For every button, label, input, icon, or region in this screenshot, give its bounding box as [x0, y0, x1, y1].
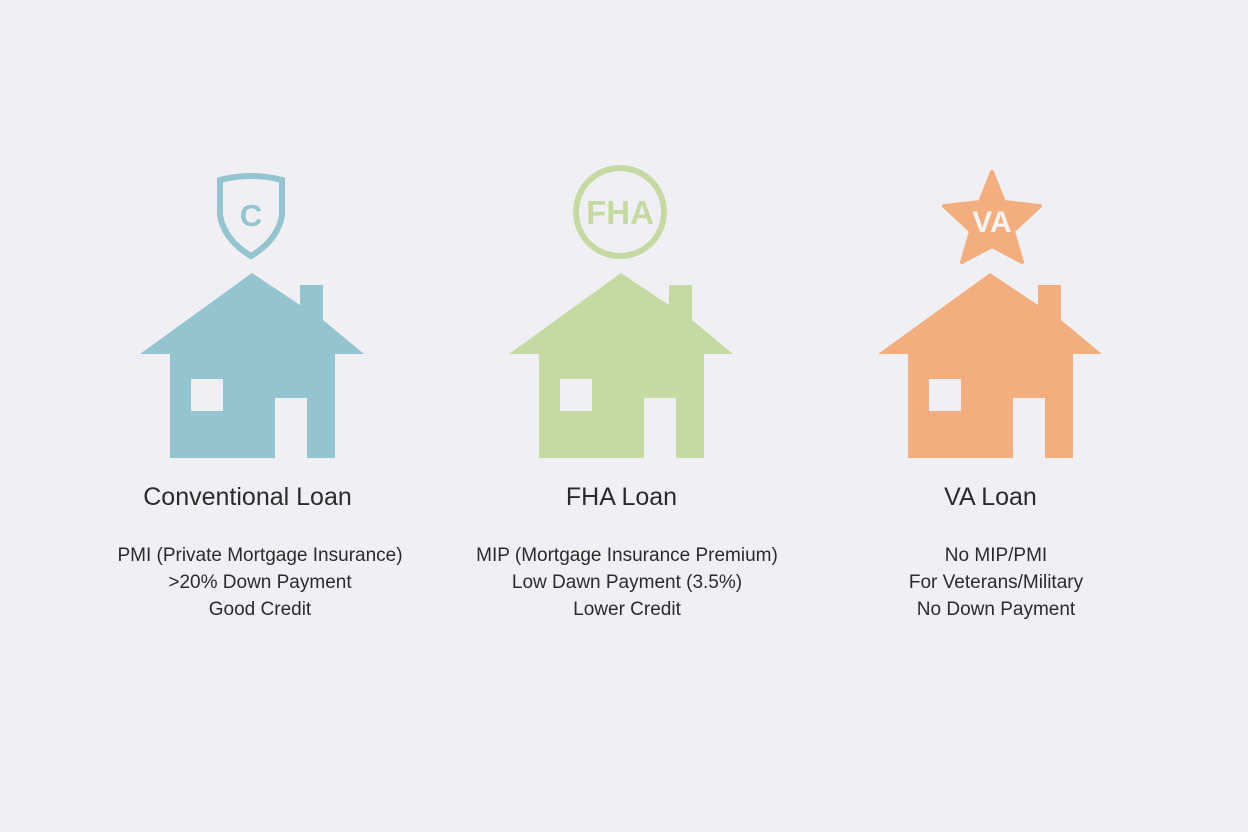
icon: shield house: C [240, 198, 262, 233]
text block [117, 545, 403, 620]
panel: conventional [117, 165, 1028, 620]
text block: Low Dawn Payment (3.5%) [512, 572, 742, 593]
text block: Lower Credit [573, 599, 681, 620]
heading: VA Loan [944, 483, 1037, 511]
heading: Conventional Loan [143, 483, 352, 511]
panel: FHA [476, 165, 1028, 620]
icon: shield house [140, 173, 364, 458]
panel: VA [878, 170, 1102, 620]
text block [476, 545, 778, 620]
text block: >20% Down Payment [168, 572, 352, 593]
text block: MIP (Mortgage Insurance Premium) [476, 545, 778, 566]
icon: VA house: VA [972, 206, 1012, 239]
text block [909, 545, 1083, 620]
text block: No Down Payment [917, 599, 1075, 620]
text block: PMI (Private Mortgage Insurance) [117, 545, 403, 566]
icon: FHA house: FHA [586, 194, 654, 231]
heading: FHA Loan [566, 483, 677, 511]
text block: For Veterans/Military [909, 572, 1083, 593]
text block: Good Credit [209, 599, 311, 620]
icon: FHA house [509, 165, 733, 458]
text block: No MIP/PMI [945, 545, 1047, 566]
icon: VA house [878, 170, 1102, 458]
